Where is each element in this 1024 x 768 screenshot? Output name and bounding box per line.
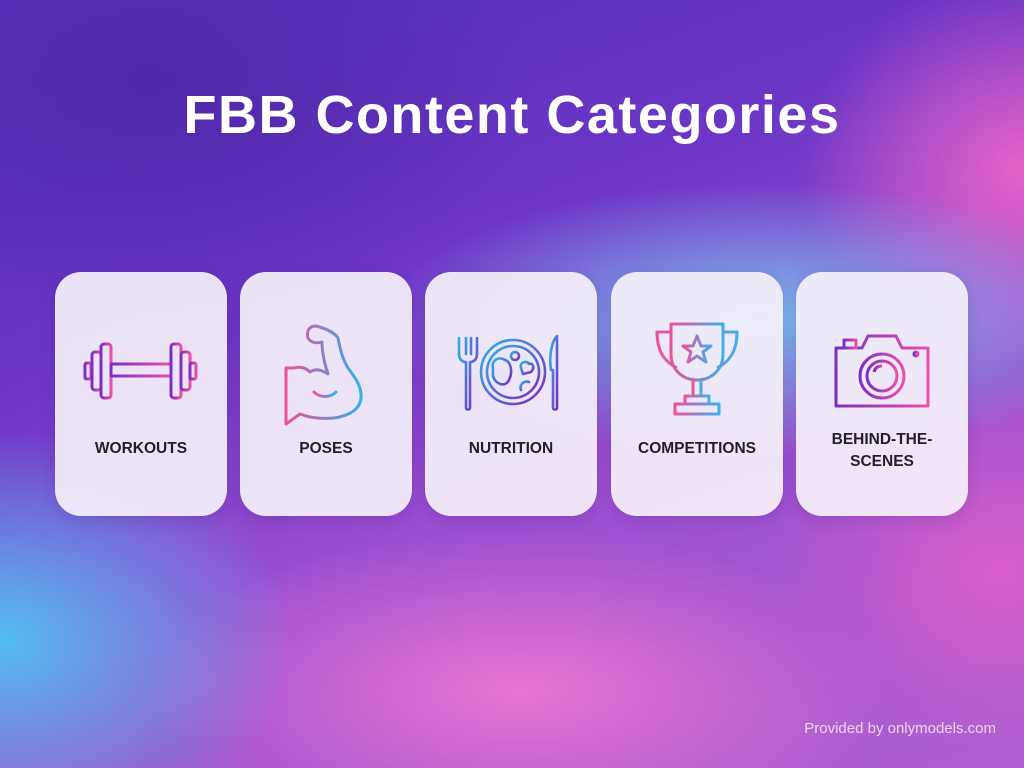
icon: trophy with star (656, 322, 738, 416)
credit text: Provided by onlymodels.com (804, 720, 996, 737)
card: nutrition (425, 272, 597, 516)
card: competitions (611, 272, 783, 516)
label: workouts: WORKOUTS (95, 440, 187, 457)
icon: flexed arm (284, 324, 363, 426)
icon: dumbbell (84, 342, 198, 400)
label: behind-the-scenes (832, 431, 932, 470)
card: workouts (55, 272, 227, 516)
label: behind-the-scenes: BEHIND-THE- (832, 431, 932, 448)
title: FBB Content Categories (183, 85, 841, 145)
label: behind-the-scenes: SCENES (850, 453, 914, 470)
label: competitions: COMPETITIONS (638, 440, 756, 457)
card: behind-the-scenes (796, 272, 968, 516)
card: poses (240, 272, 412, 516)
label: nutrition: NUTRITION (469, 440, 553, 457)
icon: plate with fork and knife (458, 334, 558, 411)
icon: camera (834, 334, 930, 408)
label: poses: POSES (299, 440, 353, 457)
